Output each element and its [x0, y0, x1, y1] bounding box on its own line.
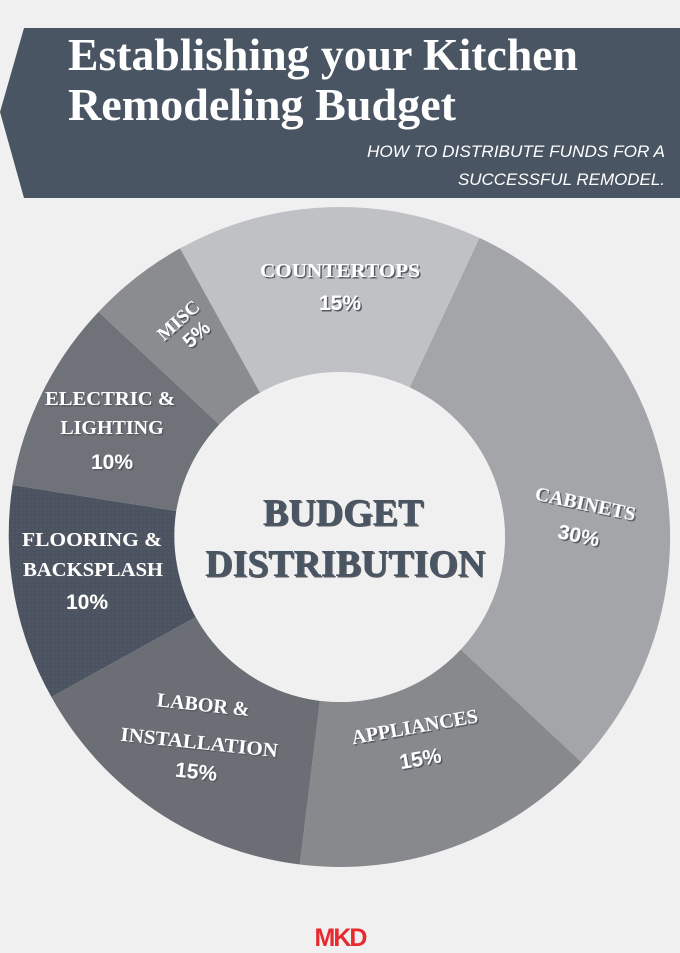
label: misc: [153, 296, 220, 362]
subtitle: HOW TO DISTRIBUTE FUNDS FOR A: [367, 142, 665, 161]
segment: misc: [99, 248, 260, 424]
label: electric: LIGHTING: [60, 417, 164, 439]
label: labor: [116, 686, 283, 792]
title: [68, 30, 578, 130]
label: cabinets: CABINETS: [533, 483, 638, 526]
label: flooring: [22, 529, 163, 614]
labels: [22, 260, 638, 792]
label: flooring: BACKSPLASH: [23, 559, 163, 581]
subtitle: SUCCESSFUL REMODEL.: [458, 170, 665, 189]
label: countertops: 15%: [319, 292, 361, 315]
label: appliances: 15%: [398, 744, 443, 774]
label: electric: ELECTRIC &: [45, 388, 175, 410]
segment: electric: [12, 312, 219, 511]
label: countertops: [260, 260, 420, 315]
segment: countertops: [180, 207, 480, 393]
label: appliances: APPLIANCES: [350, 705, 480, 749]
label: electric: [45, 388, 175, 474]
label: misc: MISC: [153, 296, 204, 345]
label: labor: LABOR &: [156, 689, 250, 721]
label: flooring: FLOORING &: [22, 529, 162, 551]
label: labor: INSTALLATION: [119, 724, 279, 762]
center circle: [175, 372, 505, 702]
center title: DISTRIBUTION: [205, 543, 485, 585]
label: appliances: [350, 705, 485, 782]
label: cabinets: [526, 483, 638, 558]
center title: BUDGET: [263, 492, 423, 534]
label: misc: 5%: [179, 317, 215, 353]
label: cabinets: 30%: [556, 521, 602, 552]
subtitle: [367, 142, 665, 189]
title: Remodeling Budget: [68, 80, 456, 130]
label: countertops: COUNTERTOPS: [260, 260, 420, 282]
segment: cabinets: [410, 238, 670, 762]
label: labor: 15%: [174, 759, 219, 786]
segment: labor: [51, 617, 320, 864]
segment: flooring: [9, 485, 196, 697]
center title: [205, 492, 485, 585]
label: flooring: 10%: [66, 591, 108, 614]
header banner: [0, 28, 680, 198]
label: electric: 10%: [91, 451, 133, 474]
segment: appliances: [300, 650, 581, 867]
title: Establishing your Kitchen: [68, 30, 578, 80]
